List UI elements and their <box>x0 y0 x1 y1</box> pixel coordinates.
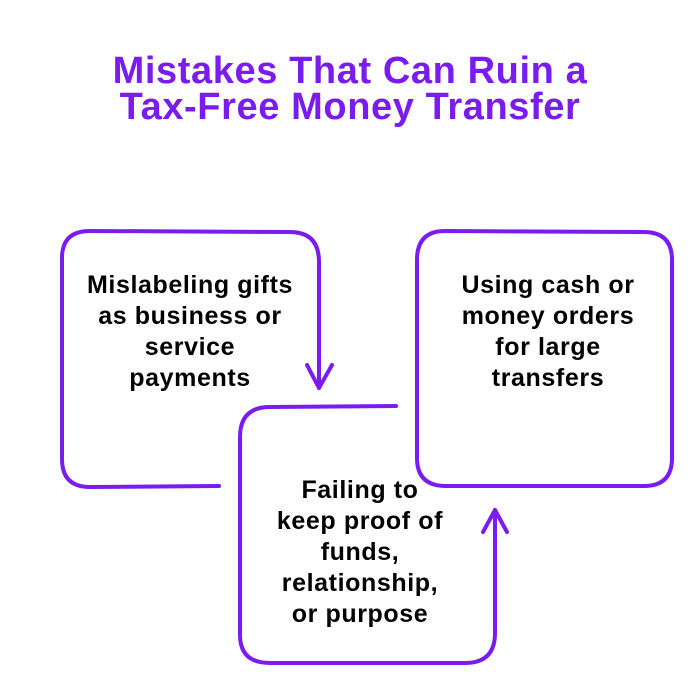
title: Tax-Free Money Transfer <box>120 86 580 128</box>
text: box 2: funds, <box>321 538 399 566</box>
text: box 2: Failing to <box>301 476 419 504</box>
text: box 3: for large <box>495 333 601 361</box>
text: box 3: Using cash or <box>461 271 635 299</box>
text: box 2 <box>277 476 443 628</box>
text: box 2: or purpose <box>292 600 428 628</box>
panel: box 3 outline <box>417 231 672 486</box>
panel: box 1 outline with arrow <box>62 231 332 487</box>
text: box 3 <box>461 271 635 392</box>
text: box 1: payments <box>129 364 251 392</box>
panel: box 2 outline with arrow <box>240 406 507 663</box>
title: Mistakes That Can Ruin a <box>113 50 587 92</box>
text: box 1 <box>87 271 293 392</box>
text: box 2: relationship, <box>282 569 438 597</box>
text: box 1: service <box>145 333 235 361</box>
text: box 1: as business or <box>98 302 282 330</box>
text: box 1: Mislabeling gifts <box>87 271 293 299</box>
text: box 2: keep proof of <box>277 507 443 535</box>
text: box 3: transfers <box>492 364 604 392</box>
title <box>113 50 587 128</box>
text: box 3: money orders <box>462 302 634 330</box>
